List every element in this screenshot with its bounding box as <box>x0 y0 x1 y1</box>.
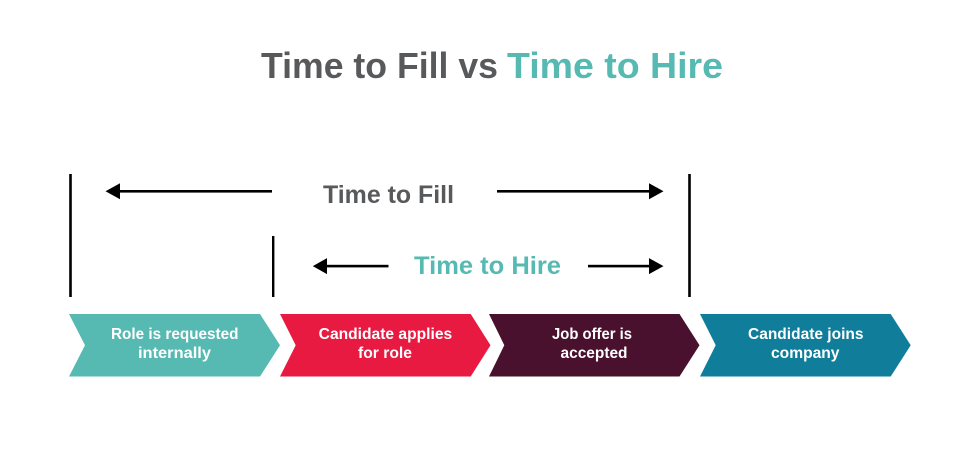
step 4: candidate joins company: Candidate joins <box>748 326 864 343</box>
step 3: job offer is accepted: Job offer is <box>552 326 632 343</box>
step 4: candidate joins company <box>700 314 911 376</box>
right boundary line <box>688 174 691 297</box>
step 1: role is requested internally <box>69 314 280 376</box>
arrow: time to hire right <box>588 258 664 274</box>
step 3: job offer is accepted: accepted <box>560 345 628 362</box>
time to hire label: Time to Hire <box>414 252 561 280</box>
title: Time to Fill vs <box>261 45 498 86</box>
arrow: time to fill left <box>106 183 272 199</box>
title: Time to Hire <box>507 45 723 86</box>
step 1: role is requested internally: internally <box>138 345 211 362</box>
step 3: job offer is accepted <box>489 314 700 376</box>
step 2: candidate applies for role: for role <box>358 345 412 362</box>
step 1: role is requested internally: Role is requested <box>111 326 238 343</box>
step 2: candidate applies for role <box>280 314 490 376</box>
step 2: candidate applies for role: Candidate applies <box>319 326 452 343</box>
left boundary line <box>69 174 72 297</box>
arrow: time to fill right <box>497 183 664 199</box>
title <box>261 45 723 86</box>
time to fill label: Time to Fill <box>323 181 454 209</box>
step 4: candidate joins company: company <box>771 345 840 362</box>
arrow: time to hire left <box>313 258 388 274</box>
middle boundary line <box>272 236 274 297</box>
